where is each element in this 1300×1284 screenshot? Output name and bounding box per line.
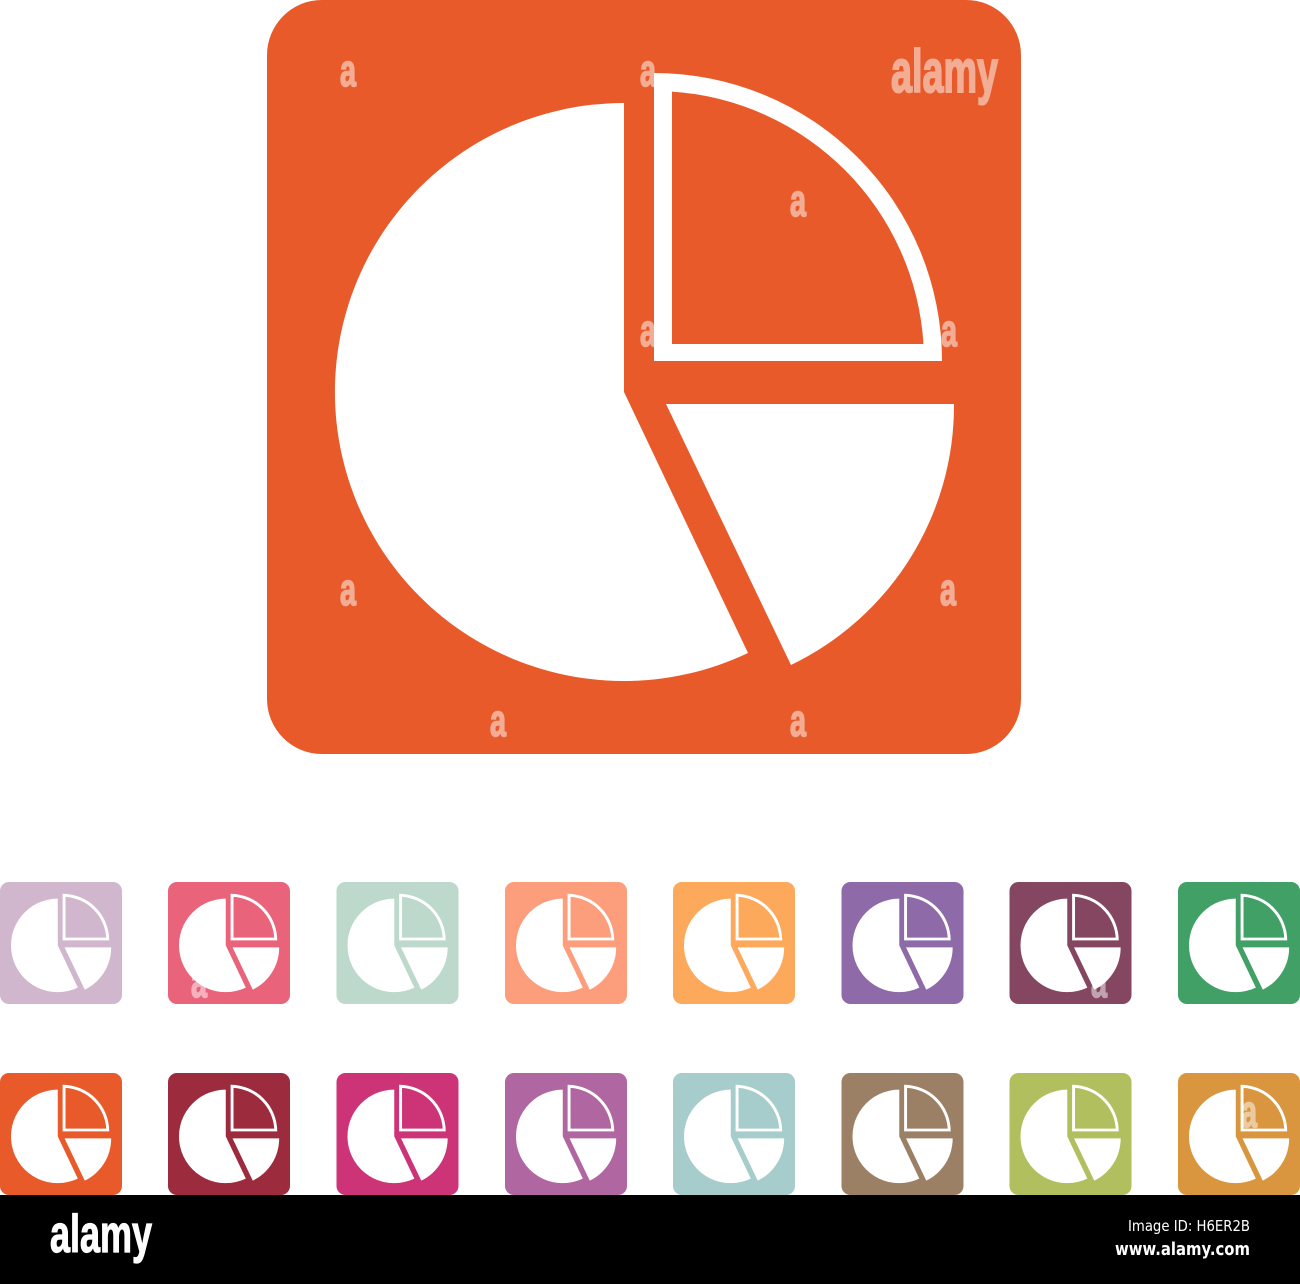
icon: light orange tile bbox=[673, 882, 795, 1004]
icon: taupe tile bbox=[842, 1073, 964, 1195]
footer: black stock-photo bar bbox=[0, 1195, 1300, 1284]
watermark: alamy logo on main icon: alamy bbox=[891, 38, 998, 105]
watermark: repeated letters on main icon: a bbox=[941, 305, 958, 356]
icon: olive tile bbox=[1010, 1073, 1132, 1195]
watermark: repeated letters on main icon: a bbox=[340, 564, 357, 615]
watermark: repeated letters on main icon: a bbox=[640, 45, 657, 96]
watermark: repeated letters on main icon: a bbox=[790, 175, 807, 226]
footer text: image ID: Image ID: H6ER2B bbox=[1128, 1217, 1250, 1235]
icon: crimson tile bbox=[168, 1073, 290, 1195]
icon: pale teal tile bbox=[673, 1073, 795, 1195]
icon row 2: eight colour variants bbox=[0, 1073, 1300, 1195]
watermark: repeated letters on main icon: a bbox=[940, 564, 957, 615]
watermark: repeated letters on main icon: a bbox=[640, 305, 657, 356]
icon: pale green tile bbox=[336, 882, 458, 1004]
watermark: letters on small icons bbox=[191, 956, 1258, 1137]
icon: magenta tile bbox=[336, 1073, 458, 1195]
watermark: letters on small icons: a bbox=[1241, 1086, 1258, 1137]
icon: green tile bbox=[1178, 882, 1300, 1004]
watermark: repeated letters on main icon bbox=[340, 45, 958, 746]
watermark: letters on small icons: a bbox=[1091, 956, 1108, 1007]
footer logo: alamy: alamy bbox=[50, 1205, 152, 1264]
main icon: orange pie chart tile bbox=[267, 0, 1021, 754]
icon: pink tile bbox=[168, 882, 290, 1004]
icon: mauve tile bbox=[0, 882, 122, 1004]
icon row 1: eight colour variants bbox=[0, 882, 1300, 1004]
footer text: website: www.alamy.com bbox=[1115, 1239, 1250, 1260]
icon: plum tile bbox=[1010, 882, 1132, 1004]
icon: amber tile bbox=[1178, 1073, 1300, 1195]
watermark: repeated letters on main icon: a bbox=[490, 695, 507, 746]
watermark: repeated letters on main icon: a bbox=[790, 695, 807, 746]
watermark: letters on small icons: a bbox=[191, 956, 208, 1007]
icon: purple tile bbox=[842, 882, 964, 1004]
icon: orchid tile bbox=[505, 1073, 627, 1195]
watermark: repeated letters on main icon: a bbox=[340, 45, 357, 96]
icon: orange tile bbox=[0, 1073, 122, 1195]
icon: salmon tile bbox=[505, 882, 627, 1004]
